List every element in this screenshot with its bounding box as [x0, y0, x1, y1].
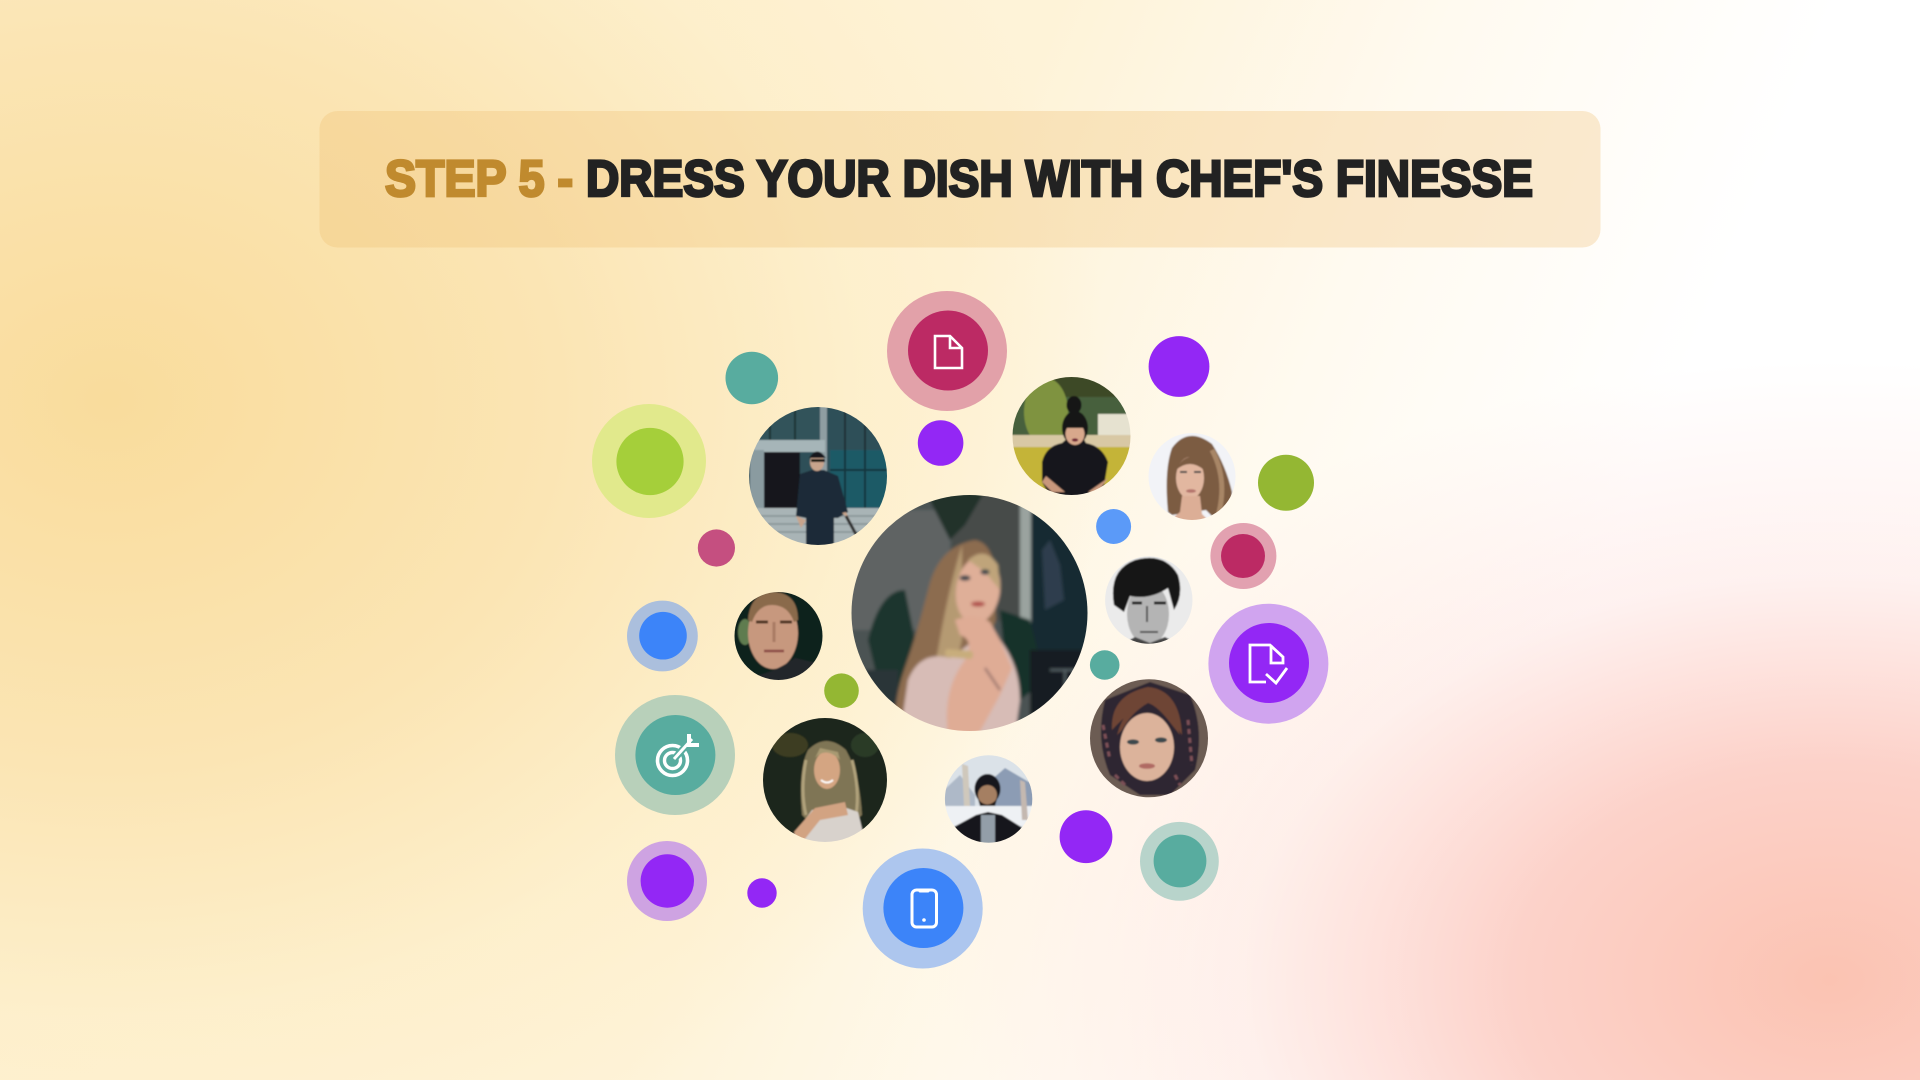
green ring: [592, 404, 706, 518]
icon: phone in blue circle: [863, 848, 983, 968]
photo: man in ski jacket: [944, 755, 1032, 843]
icon: target in teal circle: [615, 695, 735, 815]
bubble cluster: [592, 291, 1328, 968]
title: step label: STEP 5 -: [385, 150, 573, 207]
photo: woman in black top: [1012, 377, 1130, 495]
blue dot: [1096, 509, 1131, 544]
icon: document check in purple circle: [1208, 604, 1328, 724]
photo: young man: [734, 592, 822, 680]
small purple dot: [747, 878, 777, 908]
photo: man in suit: [749, 407, 887, 545]
teal ring: [1140, 822, 1219, 901]
teal dot: [726, 352, 778, 404]
green dot: [1258, 455, 1314, 511]
purple ring: [627, 841, 707, 921]
photo: man in black and white: [1105, 556, 1192, 644]
title: heading text: DRESS YOUR DISH WITH CHEF'S FINESSE: [586, 150, 1533, 207]
teal dot: [1090, 650, 1119, 680]
photo: woman with wavy hair: [1148, 433, 1236, 520]
photo: smiling blonde woman: [760, 715, 890, 845]
purple dot: [1060, 810, 1112, 863]
purple dot: [918, 420, 963, 466]
title banner: [320, 111, 1600, 248]
photo: woman in patterned scarf: [1088, 677, 1210, 799]
purple dot: [1149, 336, 1209, 397]
icon: document in pink circle: [887, 291, 1007, 411]
pink ring: [1210, 523, 1276, 589]
pink dot: [698, 529, 735, 567]
photo: central woman: [848, 491, 1092, 740]
blue ring: [627, 601, 698, 671]
green dot: [824, 673, 859, 708]
